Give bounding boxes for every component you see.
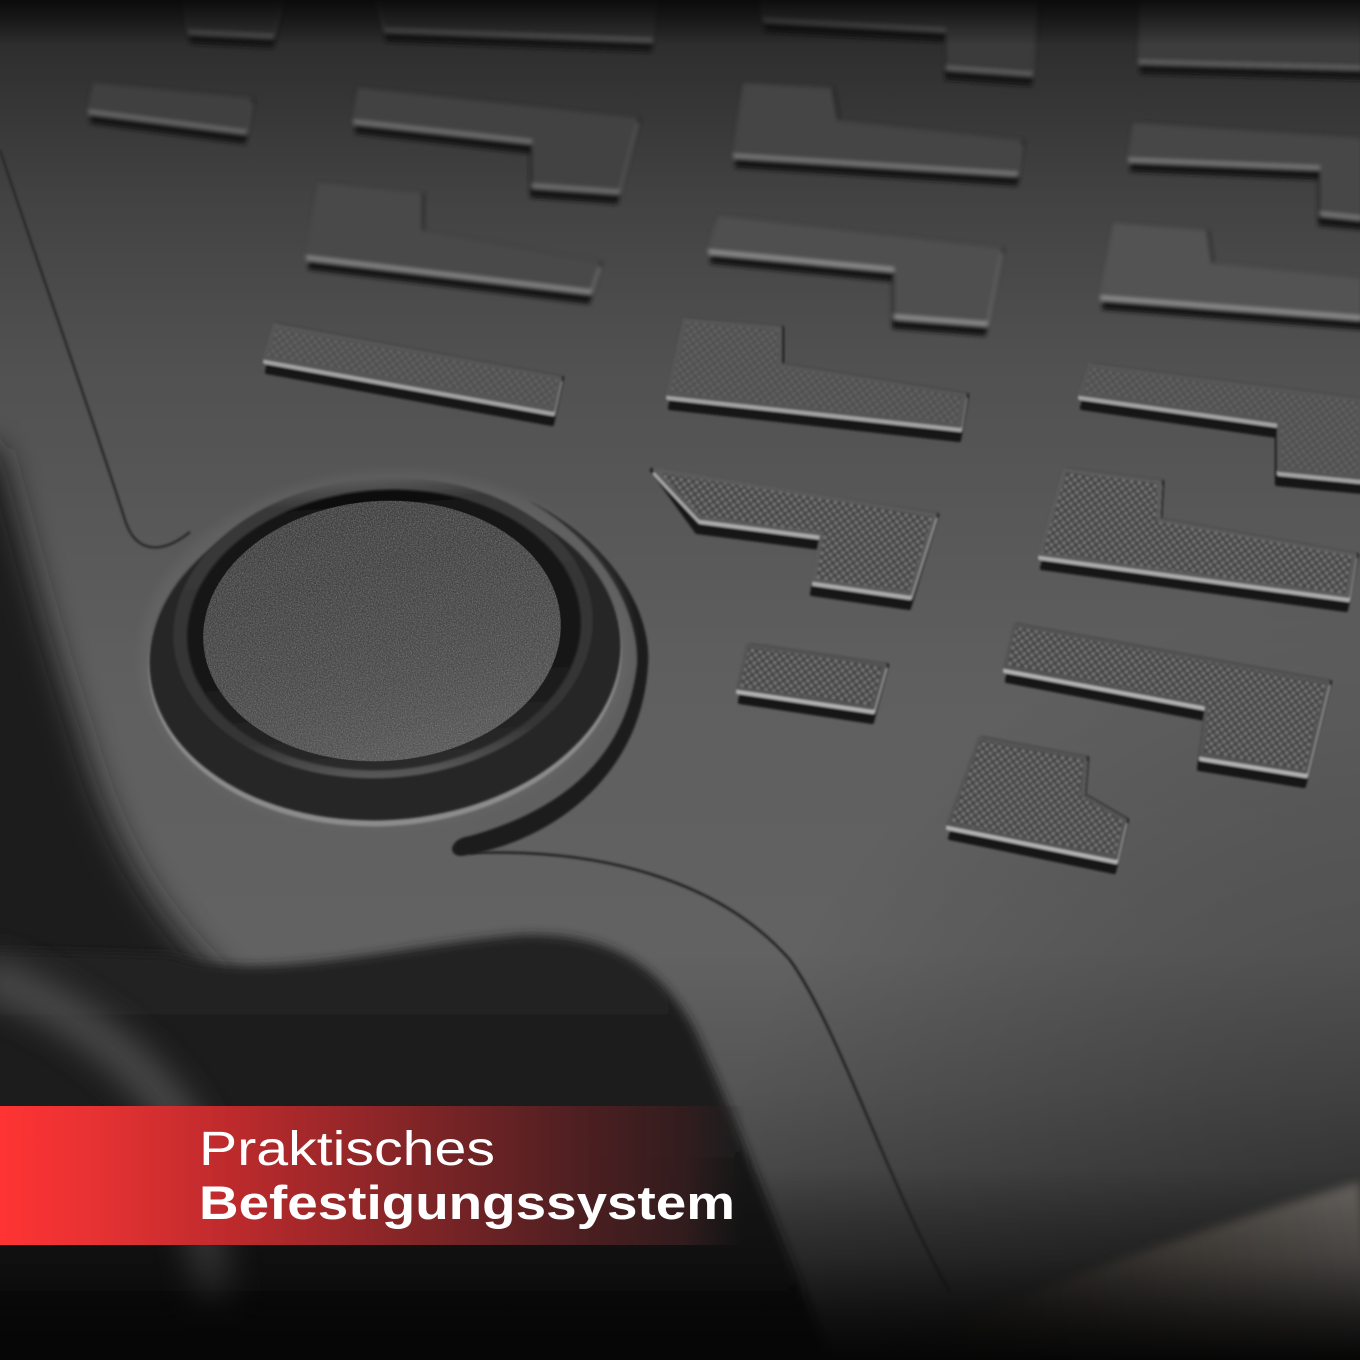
block 7	[735, 85, 1022, 184]
anti-slip blocks: middle rows	[265, 320, 1360, 610]
anti-slip blocks: front rows	[738, 625, 1330, 872]
banner: red gradient with title	[0, 1106, 745, 1245]
anti-slip blocks: rear rows, blurred	[90, 0, 1360, 334]
footwell dark recess	[0, 935, 840, 1360]
block 14	[1080, 365, 1360, 492]
title line 1: Praktisches	[199, 1123, 495, 1176]
carpet corner bottom right	[850, 1182, 1360, 1360]
button slit arc	[452, 500, 648, 856]
light lower lip	[137, 474, 633, 842]
footwell left dark edge	[0, 440, 230, 1200]
block 19	[948, 738, 1127, 872]
button disk	[194, 489, 570, 773]
block 15	[652, 470, 937, 608]
title line 2: Befestigungssystem	[199, 1176, 735, 1229]
raised rim	[163, 464, 603, 792]
banner background	[0, 1106, 745, 1245]
block 18	[1005, 625, 1330, 786]
block 12	[265, 325, 562, 424]
block 17	[738, 645, 887, 722]
block 13	[668, 320, 967, 440]
top dark vignette	[0, 0, 1360, 45]
block 8	[1130, 125, 1360, 228]
block 4	[1140, 0, 1360, 78]
block 6	[355, 90, 638, 202]
dark outer ring	[138, 472, 632, 836]
groove line lower right	[470, 852, 950, 1292]
block 2	[378, 0, 657, 50]
block 5	[90, 85, 252, 142]
fixing button	[127, 455, 648, 856]
block 10	[710, 218, 1002, 334]
block 9	[308, 185, 600, 302]
raised halo	[127, 455, 643, 845]
bottom dark vignette	[0, 1170, 1360, 1360]
inner gap	[178, 477, 590, 783]
block 11	[1102, 225, 1360, 328]
door sill light band	[0, 975, 215, 1300]
groove line upper left	[0, 150, 190, 547]
block 1	[185, 0, 284, 46]
block 3	[762, 0, 1038, 84]
block 16	[1040, 470, 1357, 610]
